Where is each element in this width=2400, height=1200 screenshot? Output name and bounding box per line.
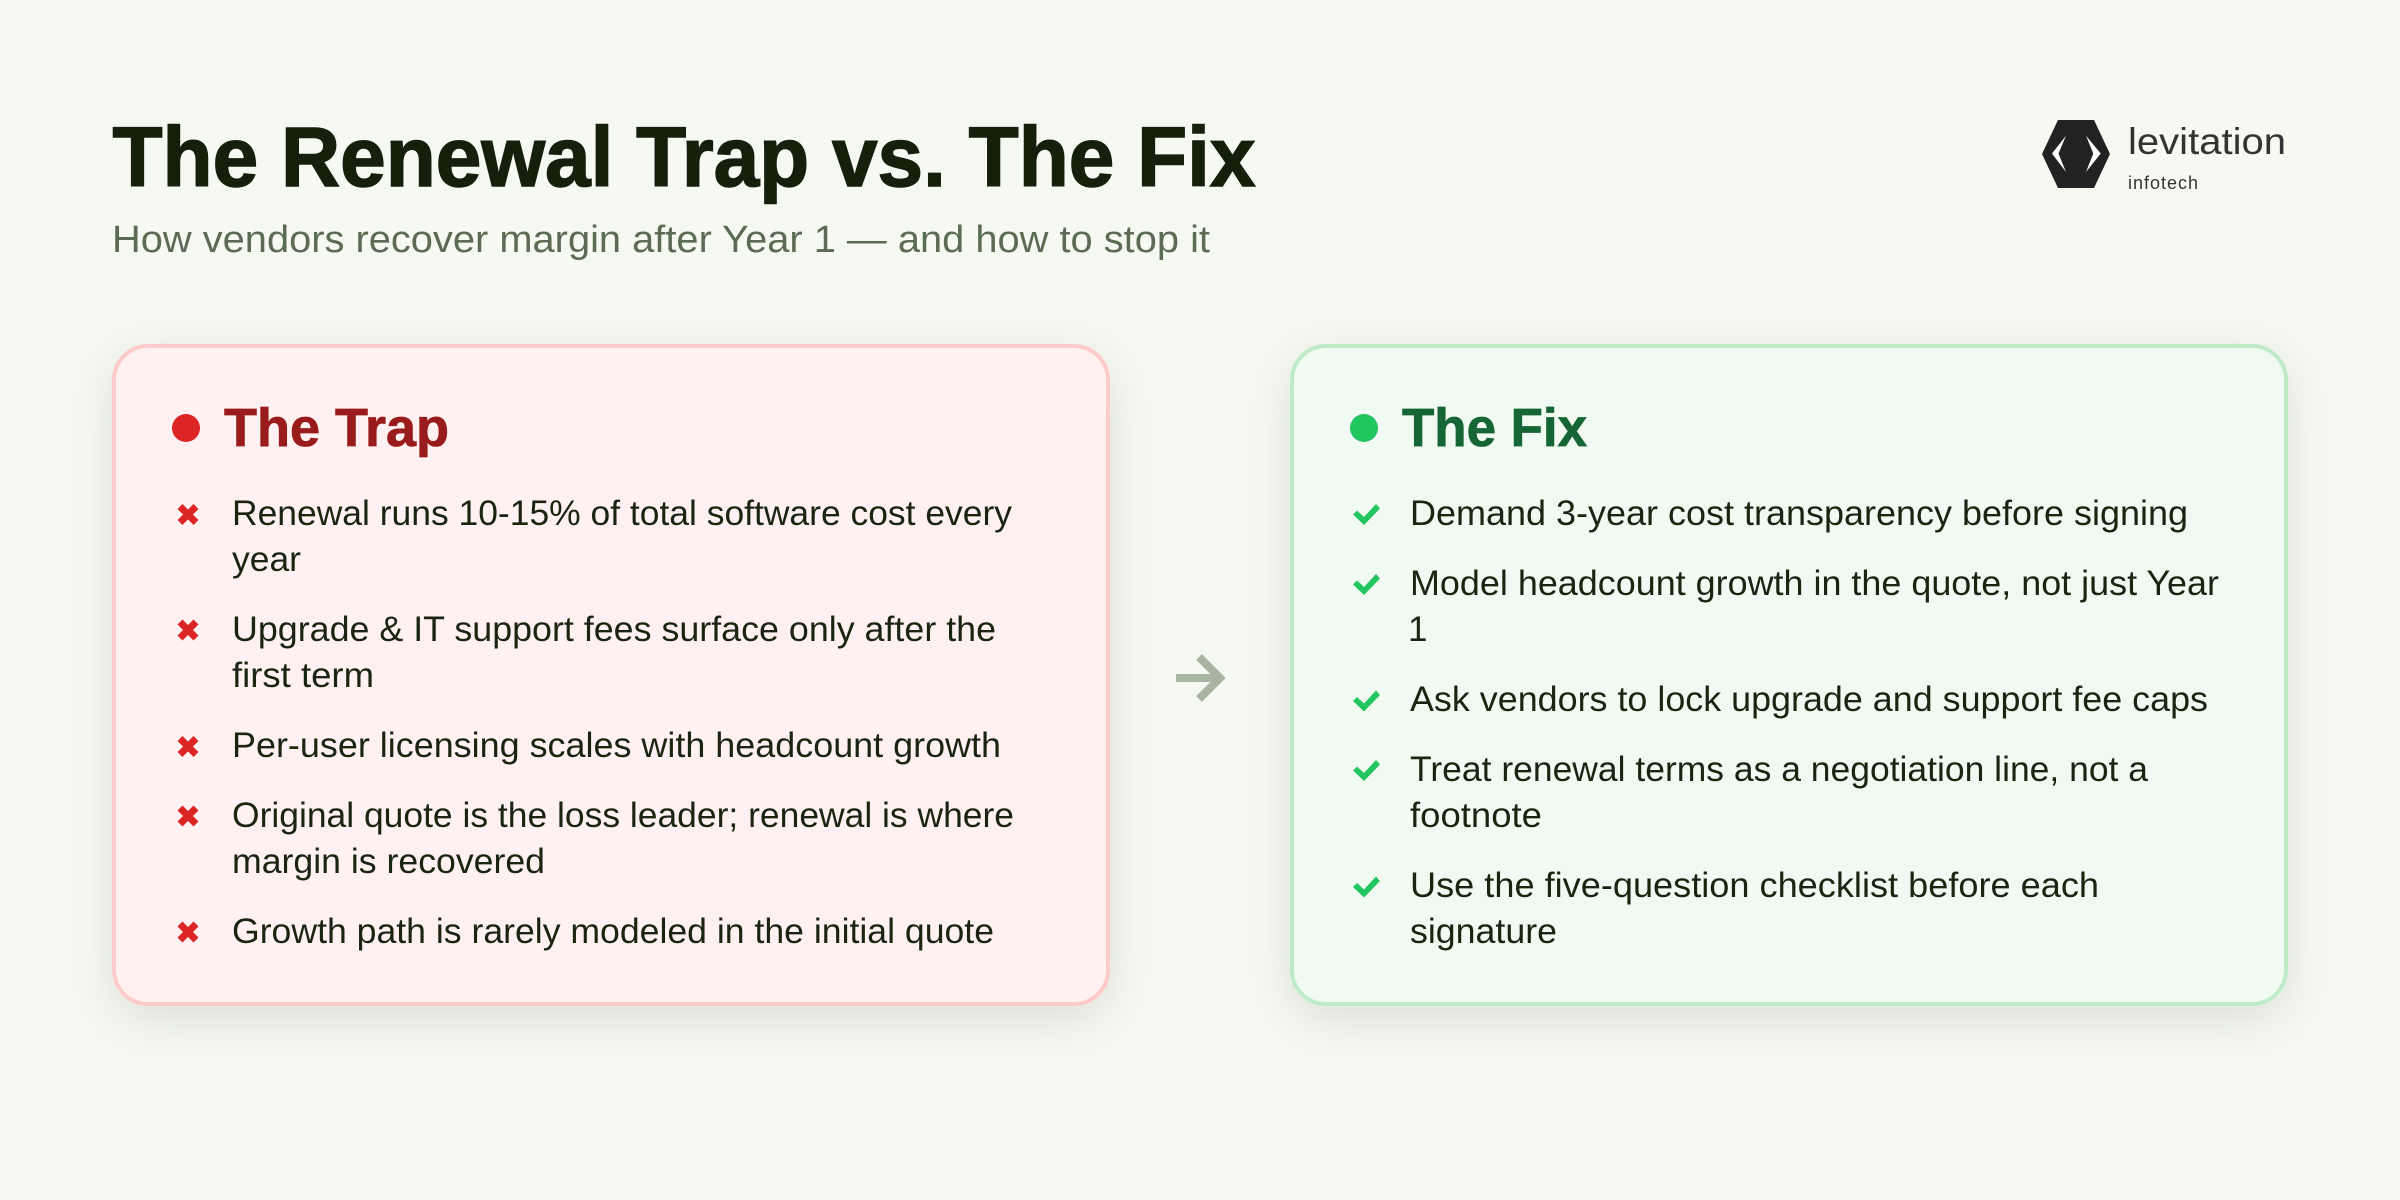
fix card background [1292,346,2286,1004]
fix heading: The Fix [1402,398,1587,458]
panel: the trap [114,346,1108,1004]
trap heading: The Trap [224,398,449,458]
logo wordmark: levitation [2128,121,2286,162]
fix item 1: Demand 3-year cost transparency before signing [1410,494,2188,533]
arrow [1176,657,1220,699]
trap item 2: Upgrade & IT support fees surface only after the [232,610,996,649]
trap item 5: Growth path is rarely modeled in the initial quote [232,912,994,951]
trap item 1: year [232,540,301,579]
fix item 4: Treat renewal terms as a negotiation line, not a [1410,750,2149,789]
trap item 3: Per-user licensing scales with headcount growth [232,726,1001,765]
fix item 2 [1353,564,2219,649]
fix item 2: Model headcount growth in the quote, not just Year [1410,564,2219,603]
fix item 2: 1 [1408,610,1427,649]
fix item 4 [1353,750,2149,835]
logo sub-wordmark: infotech [2128,173,2198,193]
fix item 5: Use the five-question checklist before each [1410,866,2099,905]
fix item 5: signature [1410,912,1557,951]
trap item 4 [180,796,1014,881]
fix item 3: Ask vendors to lock upgrade and support fee caps [1410,680,2208,719]
trap item 2: first term [232,656,374,695]
fix item 5 [1353,866,2099,951]
title: The Renewal Trap vs. The Fix [112,110,1256,204]
trap item 4: Original quote is the loss leader; renewal is where [232,796,1014,835]
icon: hexagon logo mark [2042,120,2110,188]
trap item 1 [180,494,1012,579]
panel: the fix [1292,346,2286,1004]
fix item 4: footnote [1410,796,1542,835]
trap item 2 [180,610,996,695]
trap item 1: Renewal runs 10-15% of total software cost every [232,494,1012,533]
logo: levitation infotech [2042,120,2286,193]
subtitle: How vendors recover margin after Year 1 — and how to stop it [112,219,1210,261]
trap card background [114,346,1108,1004]
trap item 4: margin is recovered [232,842,545,881]
